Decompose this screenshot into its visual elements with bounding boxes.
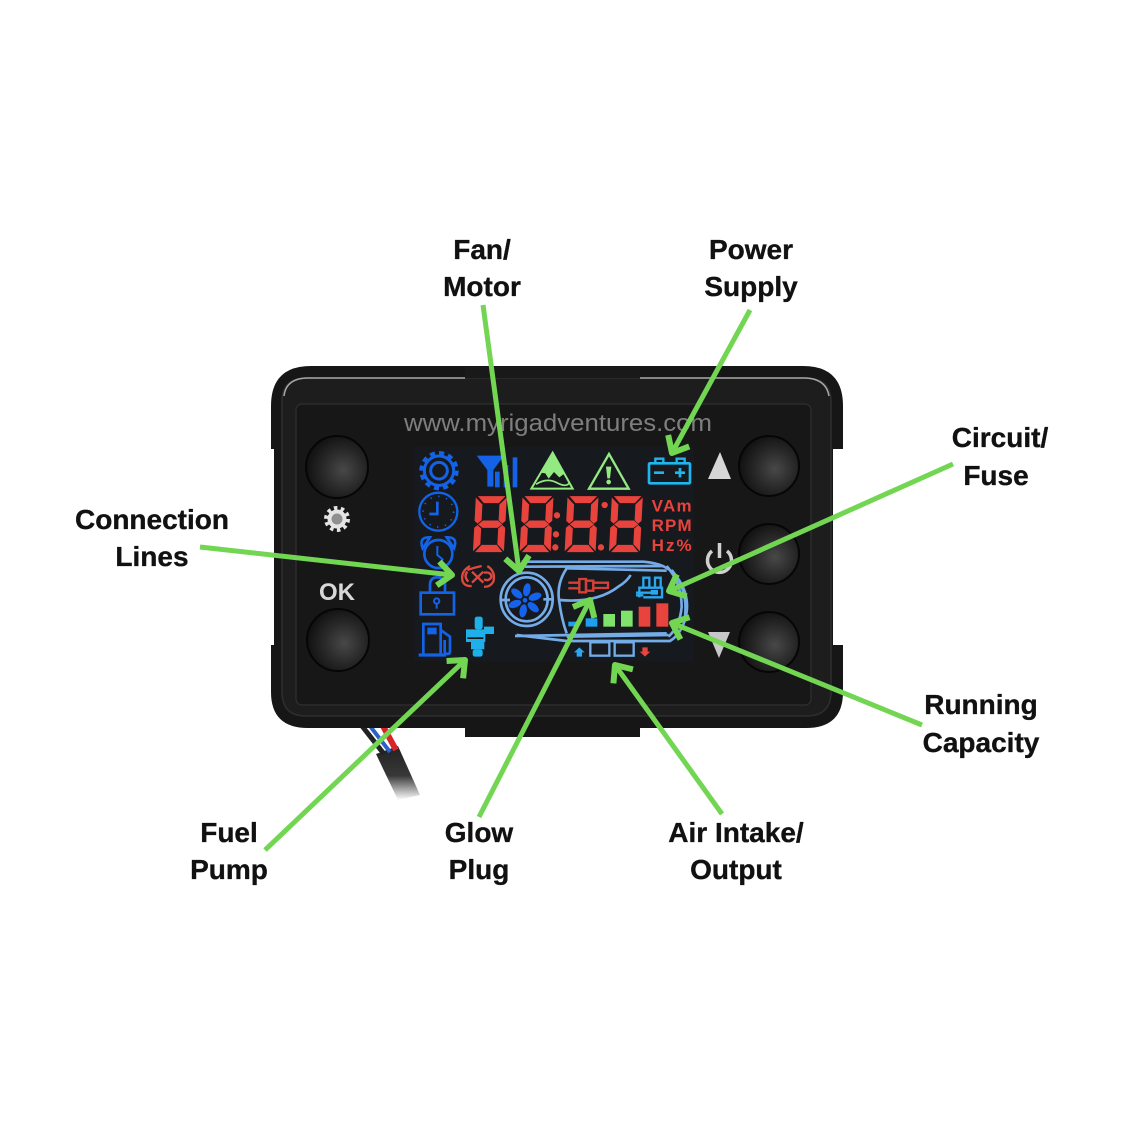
label: connection lines: Connection — [75, 504, 229, 535]
label: connection lines: Lines — [115, 541, 189, 572]
arrow: air intake — [615, 665, 722, 814]
label: fuel pump: Fuel — [200, 817, 258, 848]
label: fuel pump: Pump — [190, 854, 268, 885]
arrow: glow plug — [479, 600, 590, 817]
icon: up triangle — [708, 452, 731, 479]
unit labels: RPM — [652, 516, 692, 535]
arrow: fan motor — [483, 305, 519, 571]
icon: fuse circuit — [636, 578, 662, 597]
air intake and output — [574, 642, 650, 657]
icon: glow plug — [568, 579, 608, 592]
label: power supply: Power — [709, 234, 793, 265]
icon: signal — [477, 456, 517, 487]
button: OK — [307, 609, 369, 671]
unit labels: Hz% — [652, 536, 692, 555]
label: circuit fuse: Fuse — [963, 460, 1029, 491]
arrow: power supply — [672, 310, 750, 453]
icon: down triangle — [708, 632, 730, 658]
label: fan motor: Fan/ — [453, 234, 511, 265]
icon: power — [708, 543, 732, 572]
icon: lock — [421, 577, 454, 614]
icon: fuel injector — [466, 617, 494, 657]
cable wires — [362, 726, 420, 800]
arrow: connection lines — [200, 547, 452, 575]
label: running capacity: Capacity — [923, 727, 1040, 758]
label: glow plug: Plug — [449, 854, 509, 885]
OK label: OK — [319, 579, 356, 606]
arrow: circuit fuse — [669, 464, 953, 591]
label: glow plug: Glow — [445, 817, 513, 848]
unit labels — [652, 497, 692, 555]
label: air intake output: Output — [690, 854, 782, 885]
label: air intake output: Air Intake/ — [668, 817, 804, 848]
icon: clock — [419, 493, 457, 531]
heater outline — [500, 562, 687, 641]
icon: mountain — [531, 453, 573, 489]
icon: settings gear — [326, 508, 348, 530]
label: fan motor: Motor — [443, 271, 521, 302]
capacity bars — [568, 603, 668, 627]
label: power supply: Supply — [704, 271, 798, 302]
button: power — [739, 524, 799, 584]
button: gear — [306, 436, 368, 498]
icon: gear — [422, 453, 456, 488]
icon: battery — [649, 459, 690, 483]
seven-segment digits — [473, 497, 642, 552]
arrow: fuel pump — [265, 660, 465, 850]
LCD screen — [414, 447, 694, 661]
arrow: running capacity — [672, 623, 922, 725]
icon: warning triangle — [589, 454, 629, 489]
button: up — [739, 436, 799, 496]
watermark: www.myrigadventures.com — [403, 410, 712, 437]
label: circuit fuse: Circuit/ — [952, 422, 1048, 453]
button: down — [739, 612, 799, 672]
unit labels: VAm — [652, 497, 692, 516]
device body — [271, 366, 843, 737]
icon: fuel pump — [419, 624, 450, 655]
icon: alarm clock — [421, 537, 455, 568]
icon: connection lines — [462, 566, 494, 587]
label: running capacity: Running — [924, 689, 1038, 720]
icon: fan — [507, 583, 543, 618]
